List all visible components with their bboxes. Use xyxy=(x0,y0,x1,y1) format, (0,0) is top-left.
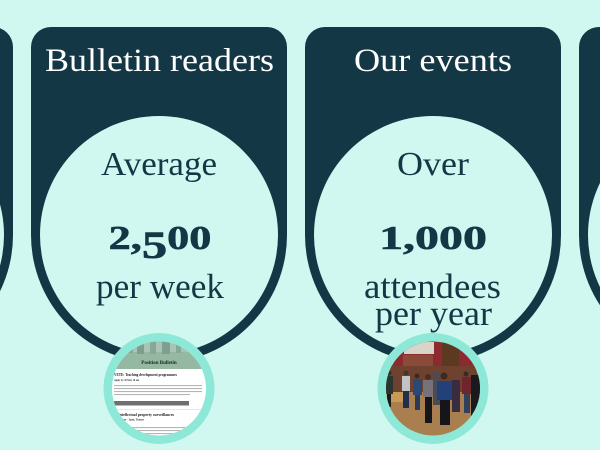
thumbnail: bulletin page: 10 June - 1pm, Teams xyxy=(116,418,145,422)
circle interior xyxy=(40,116,278,354)
card shape xyxy=(305,27,561,363)
number: 1,000 xyxy=(379,219,487,256)
label: attendees per year: per year xyxy=(375,294,492,333)
card shape xyxy=(31,27,287,363)
number: 5 xyxy=(142,224,167,267)
panel: left partial card xyxy=(0,27,13,363)
panel: right partial card xyxy=(579,27,600,363)
number: 00 xyxy=(167,219,211,257)
heading: Bulletin readers xyxy=(45,43,274,79)
label: per week: per week xyxy=(96,267,224,306)
thumbnail: bulletin page xyxy=(104,333,214,444)
thumbnail: event photo xyxy=(378,333,488,444)
thumbnail: bulletin page: Position Bulletin xyxy=(141,361,177,366)
number: 2, xyxy=(109,219,142,257)
thumbnail: bulletin page: Apply by 30 May 10 am xyxy=(114,378,139,382)
thumbnail: bulletin page: for intellectual property surveillances xyxy=(113,412,174,417)
panel: bulletin readers xyxy=(31,27,287,363)
panel: our events xyxy=(305,27,561,363)
label: attendees per year xyxy=(364,267,501,333)
label: over: Over xyxy=(397,146,470,183)
circle interior xyxy=(314,116,552,354)
label: average: Average xyxy=(101,146,217,183)
heading: Our events xyxy=(354,43,512,79)
thumbnail: bulletin page: VETE: Teaching development programmes xyxy=(114,372,177,377)
label: attendees per year: attendees xyxy=(364,267,501,306)
